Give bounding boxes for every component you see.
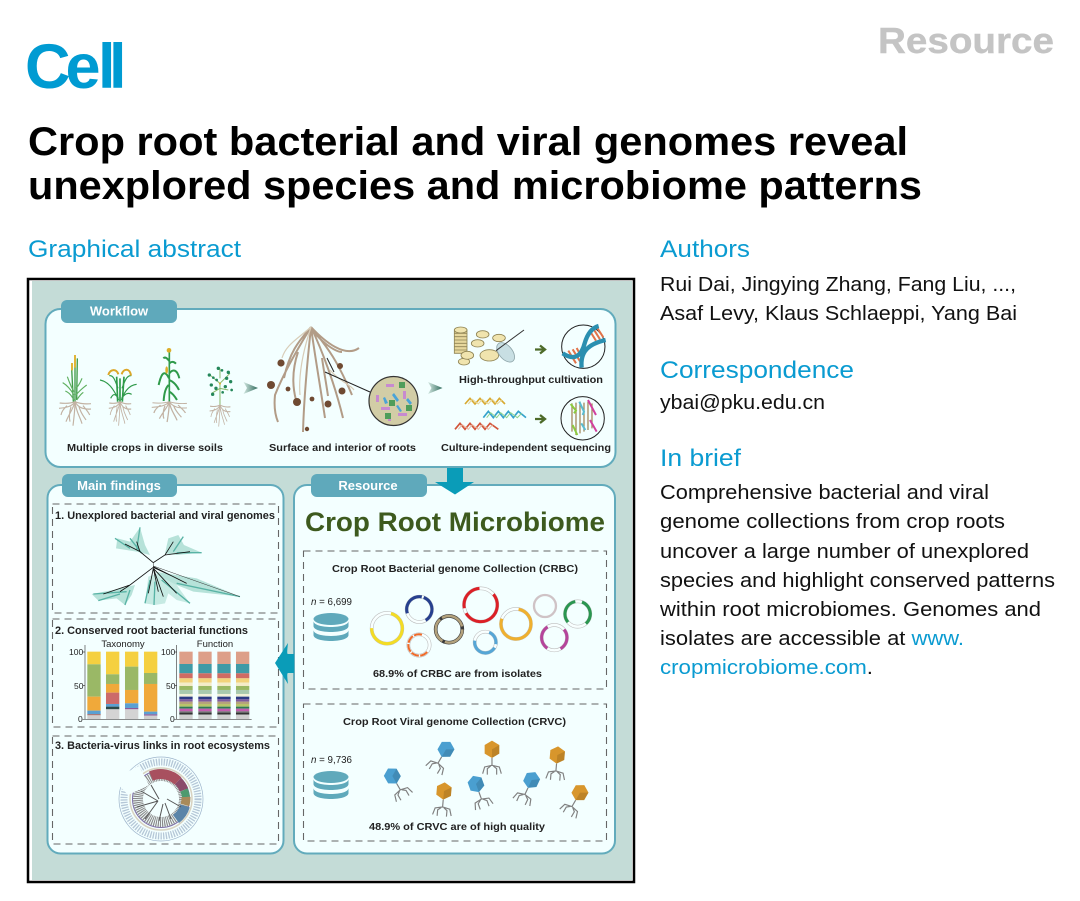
heading: CRVC: Crop Root Viral genome Collection (CRVC) — [343, 716, 566, 728]
icon: wheat plant — [59, 355, 91, 426]
in brief text: genome collections from crop roots — [660, 511, 1005, 533]
tab label: Workflow: Workflow — [90, 304, 149, 318]
panel: workflow — [46, 300, 616, 467]
bar chart: function: 0 — [170, 714, 175, 724]
icon: database CRBC — [314, 613, 348, 641]
label: multiple crops: Multiple crops in diverse soils — [67, 442, 223, 454]
caption: CRVC: 48.9% of CRVC are of high quality — [369, 821, 545, 833]
in brief text — [659, 482, 1055, 679]
icon: rice plant — [100, 370, 137, 426]
bar chart: function: 100 — [161, 647, 175, 657]
caption: CRBC: 68.9% of CRBC are from isolates — [373, 668, 542, 680]
arrow: crops to roots — [244, 382, 258, 394]
graphical abstract frame — [28, 279, 634, 882]
heading: In brief: In brief — [660, 445, 741, 472]
icon: sequencing reads — [455, 398, 526, 429]
heading: Crop Root Microbiome: Crop Root Microbiome — [305, 507, 605, 537]
in brief text: cropmicrobiome.com . — [660, 657, 873, 679]
icon: DNA in circle — [562, 325, 606, 368]
correspondence email: ybai@pku.edu.cn — [660, 392, 825, 414]
icon: maize plant — [152, 348, 187, 422]
arrow: resource to main findings — [275, 643, 294, 684]
heading: finding 1: 1. Unexplored bacterial and viral genomes — [55, 510, 275, 522]
arrow: roots to methods — [428, 382, 442, 394]
icon: petri dishes and culture tool — [454, 327, 524, 365]
heading: finding 2: 2. Conserved root bacterial functions — [55, 625, 248, 637]
arrow: green cultivation arrow — [535, 346, 545, 354]
in brief text: within root microbiomes. Genomes and — [659, 599, 1041, 621]
label: surface and interior: Surface and interior of roots — [269, 442, 416, 454]
icon: magnified root microbes — [369, 376, 418, 426]
authors text: Asaf Levy, Klaus Schlaeppi, Yang Bai — [660, 303, 1017, 325]
arrow: green sequencing arrow — [535, 415, 545, 423]
heading: Correspondence: Correspondence — [660, 357, 854, 384]
arrow: workflow to resource — [435, 468, 474, 494]
count: n = 9,736: n = 9,736 — [311, 754, 352, 766]
finding 1: unexplored genomes — [52, 504, 278, 613]
label: Taxonomy: Taxonomy — [101, 639, 145, 650]
icon: genome assembly in circle — [561, 397, 604, 440]
tab label: Resource: Resource — [338, 478, 398, 493]
heading: Authors: Authors — [660, 236, 750, 263]
label: Function: Function — [197, 639, 233, 650]
plasmid rings — [368, 582, 594, 660]
in brief text: species and highlight conserved patterns — [660, 570, 1055, 592]
bar chart: taxonomy: 0 — [78, 714, 83, 724]
bar chart: taxonomy: 100 — [69, 647, 83, 657]
circular phylogeny — [113, 757, 203, 841]
title — [28, 120, 922, 208]
label: high-throughput cultivation: High-throughput cultivation — [459, 374, 603, 386]
CRBC collection — [304, 551, 606, 689]
phylogenetic tree — [92, 527, 240, 605]
tab label: Main findings: Main findings — [77, 478, 161, 493]
finding 3: bacteria-virus links — [52, 736, 278, 844]
article type: Resource: Resource — [878, 20, 1054, 61]
bar chart: taxonomy — [69, 645, 160, 724]
count: n = 6,699: n = 6,699 — [311, 596, 352, 608]
CRVC collection — [304, 704, 606, 841]
label: culture-independent: Culture-independent sequencing — [441, 442, 611, 454]
icon: soybean plant — [208, 367, 233, 427]
bar chart: function: 50 — [166, 681, 176, 691]
panel: main findings — [48, 474, 284, 854]
panel: resource — [294, 474, 615, 854]
heading: CRBC: Crop Root Bacterial genome Collection (CRBC) — [332, 563, 578, 575]
icon: root system with soil particles — [267, 327, 370, 432]
bar chart: function — [161, 645, 252, 724]
in brief text: uncover a large number of unexplored — [660, 541, 1029, 563]
in brief text: Comprehensive bacterial and viral — [660, 482, 989, 504]
logo: Cell: Cell — [25, 32, 127, 102]
title: unexplored species and microbiome patterns — [28, 164, 922, 208]
icon: database CRVC — [314, 771, 348, 799]
heading: Graphical abstract: Graphical abstract — [28, 236, 241, 263]
authors text: Rui Dai, Jingying Zhang, Fang Liu, ..., — [660, 274, 1016, 296]
finding 2: conserved functions — [52, 619, 278, 727]
bacteriophages — [380, 737, 592, 819]
title: Crop root bacterial and viral genomes reveal — [28, 120, 908, 164]
in brief text: isolates are accessible at www. — [660, 628, 964, 650]
bar chart: taxonomy: 50 — [74, 681, 84, 691]
heading: finding 3: 3. Bacteria-virus links in root ecosystems — [55, 740, 270, 752]
authors text — [660, 274, 1017, 325]
